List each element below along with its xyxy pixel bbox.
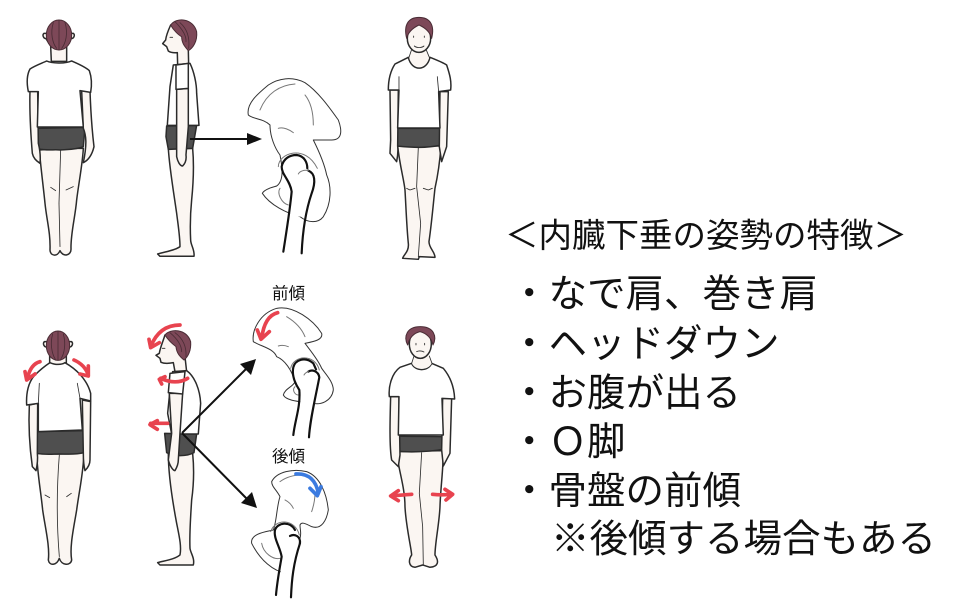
list: posture characteristics: ・骨盤の前傾 [510,470,741,513]
illustration: neutral pelvis [248,79,341,253]
figure: poor posture back view [27,331,91,564]
list: posture characteristics: ・Ｏ脚 [510,421,626,464]
illustration: posterior tilt pelvis [252,470,328,597]
label: posterior tilt: 後傾 [272,447,306,466]
list: posture characteristics [510,273,936,561]
arrow: side figure to posterior tilt pelvis [182,433,257,508]
arrow: side figure to anterior tilt pelvis [182,359,256,433]
list: posture characteristics: ・お腹が出る [510,372,741,415]
heading: characteristics of visceroptosis posture: ＜内臓下垂の姿勢の特徴＞ [505,218,907,255]
label: anterior tilt: 前傾 [272,284,306,303]
figure: normal posture front view [388,17,451,259]
arrow: standing figure to neutral pelvis [190,133,262,145]
list: posture characteristics: ・なで肩、巻き肩 [510,273,818,316]
illustration: anterior tilt pelvis [253,308,333,437]
figure: poor posture side view [149,325,201,565]
figure: poor posture front view [389,327,455,567]
list: posture characteristics: ・ヘッドダウン [510,323,780,366]
figure: normal posture back view [27,20,94,255]
icons: red shoulder arrows [25,360,88,380]
list: posture characteristics: ※後傾する場合もある [551,518,936,561]
figure: normal posture side view [158,20,199,256]
